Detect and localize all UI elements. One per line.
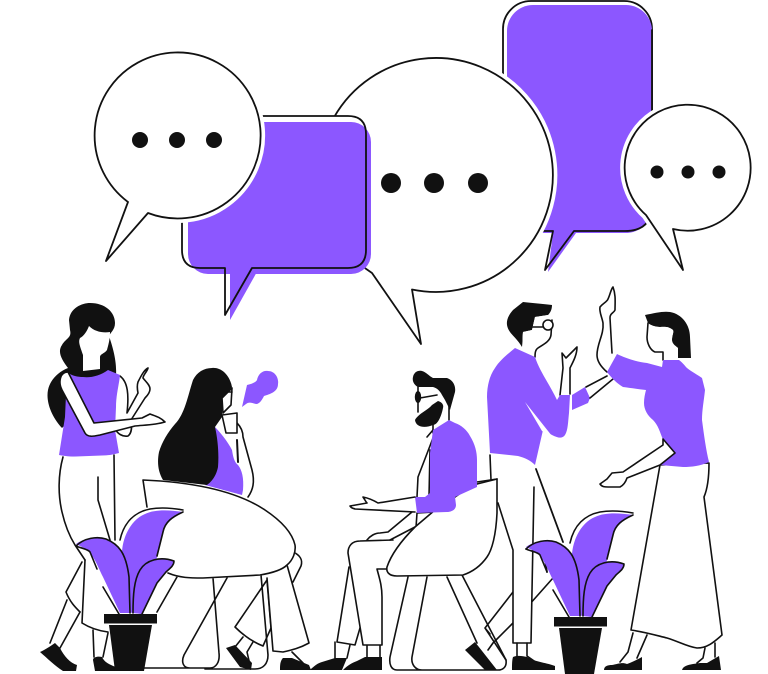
chair: left seat [143, 480, 295, 669]
plant: left potted [76, 508, 183, 671]
person: seated man with beard [310, 371, 497, 670]
person: standing woman left [40, 303, 165, 671]
speech bubble: top purple square [503, 1, 652, 272]
person: seated woman legs [226, 552, 311, 670]
person: standing man behind [465, 302, 613, 670]
speech bubble: large centre circle [319, 58, 553, 344]
plant: right potted [526, 511, 633, 674]
woman raised arm [115, 368, 150, 436]
speech bubble: left purple square [182, 116, 371, 320]
chair: centre seat [390, 575, 506, 670]
speech bubble: small right circle [625, 105, 751, 270]
person: standing woman right [597, 287, 722, 670]
person: seated woman with drink [158, 368, 278, 497]
icon: purple steam puff [242, 371, 278, 407]
speech bubble: left circle [95, 52, 261, 261]
